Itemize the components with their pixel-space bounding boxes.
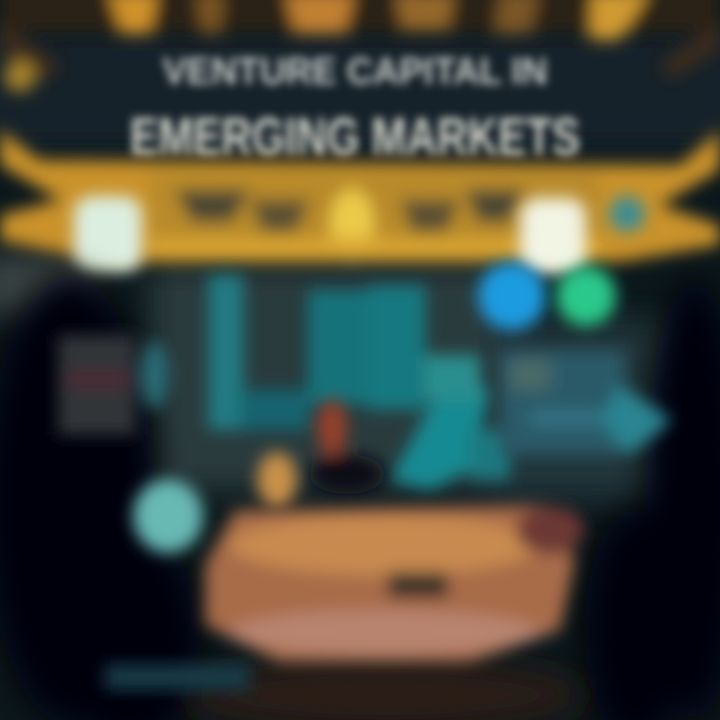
lower floor shadow xyxy=(185,660,585,720)
icon: right white light xyxy=(520,198,586,274)
title: EMERGING MARKETS xyxy=(130,107,580,167)
icon: left white light xyxy=(74,196,142,272)
conference table xyxy=(205,505,584,662)
icon: small teal light xyxy=(609,196,645,232)
golden beam band xyxy=(0,130,720,262)
figure: seated person xyxy=(257,452,297,508)
right dark figure xyxy=(585,280,720,720)
right chart panel xyxy=(500,350,672,455)
icon: blue circle xyxy=(478,262,546,330)
bottom left teal glow xyxy=(105,664,250,690)
ceiling lights xyxy=(0,0,720,92)
teal bar chart xyxy=(208,275,510,490)
title xyxy=(130,51,580,167)
icon: green circle xyxy=(556,266,616,326)
left dark figure xyxy=(0,275,200,720)
room mid tones xyxy=(0,30,720,500)
title: VENTURE CAPITAL IN xyxy=(162,51,548,93)
figure: presenter xyxy=(309,400,385,494)
left screen panel xyxy=(58,335,169,435)
icon: teal circle xyxy=(133,479,203,553)
